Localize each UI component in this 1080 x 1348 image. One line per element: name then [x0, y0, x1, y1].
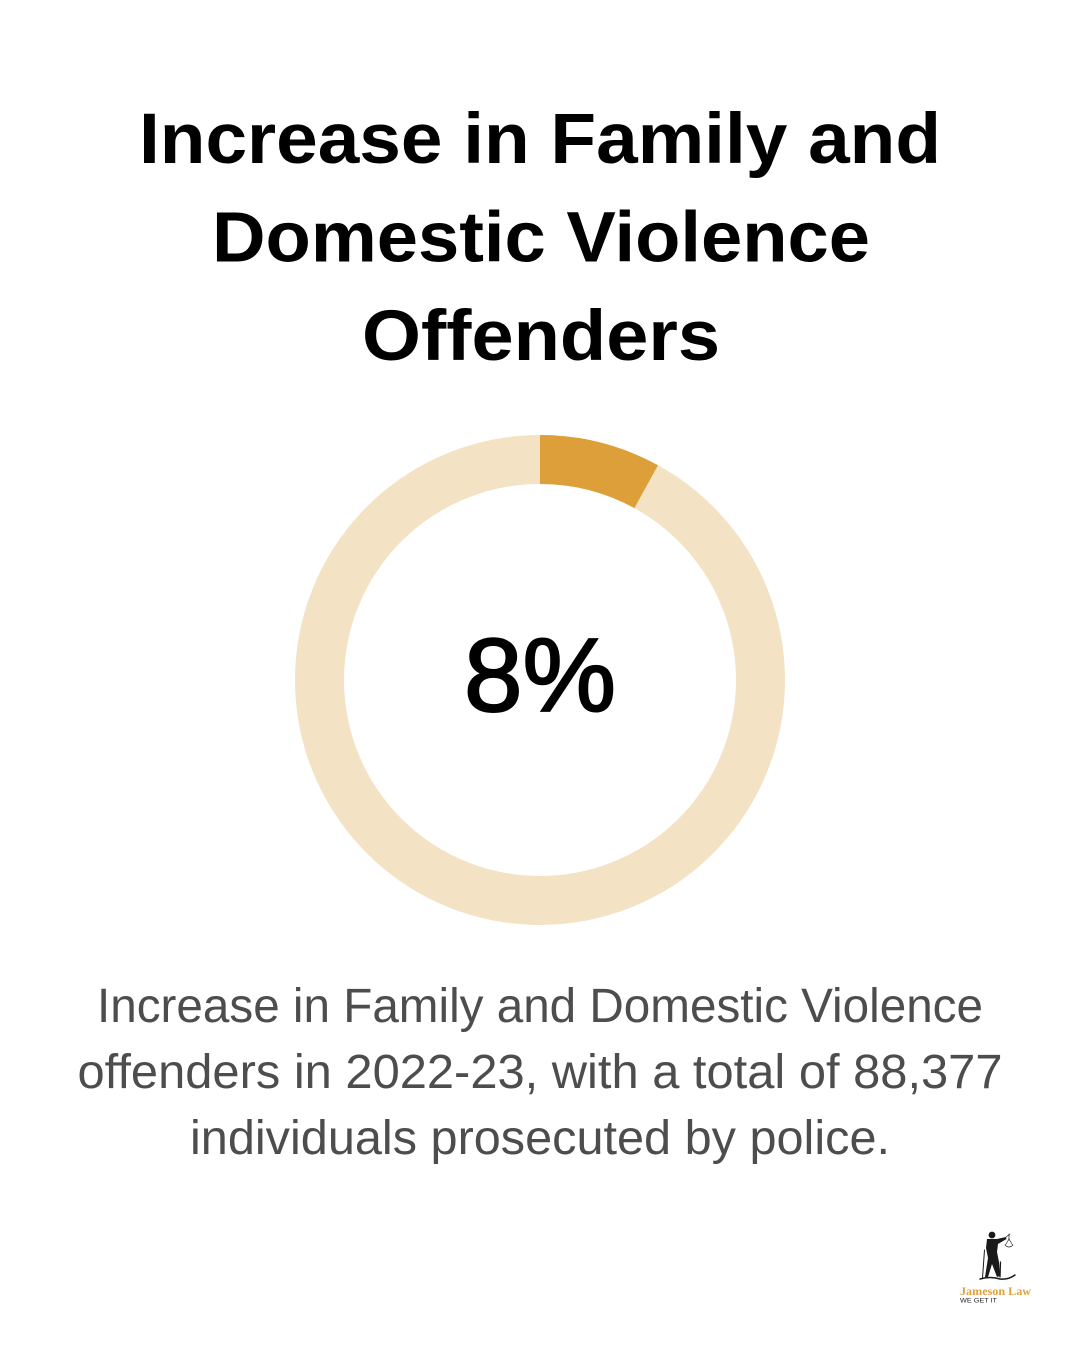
- logo tagline: WE GET IT: [960, 1298, 997, 1304]
- title: [139, 100, 941, 376]
- description text: offenders in 2022-23, with a total of 88,377: [78, 1046, 1002, 1099]
- title: Offenders: [362, 297, 720, 376]
- description text: Increase in Family and Domestic Violence: [97, 980, 983, 1033]
- highlighted 8% segment: [540, 435, 658, 508]
- title: Increase in Family and: [139, 100, 941, 179]
- description text: individuals prosecuted by police.: [190, 1112, 890, 1165]
- icon: lady justice: [980, 1232, 1015, 1279]
- logo name: Jameson Law: [960, 1286, 1032, 1298]
- donut chart: 8%: [320, 435, 760, 900]
- title: Domestic Violence: [212, 198, 870, 278]
- center value: 8%: [464, 618, 616, 734]
- logo: Jameson Law: [960, 1232, 1032, 1304]
- description text: [78, 980, 1002, 1165]
